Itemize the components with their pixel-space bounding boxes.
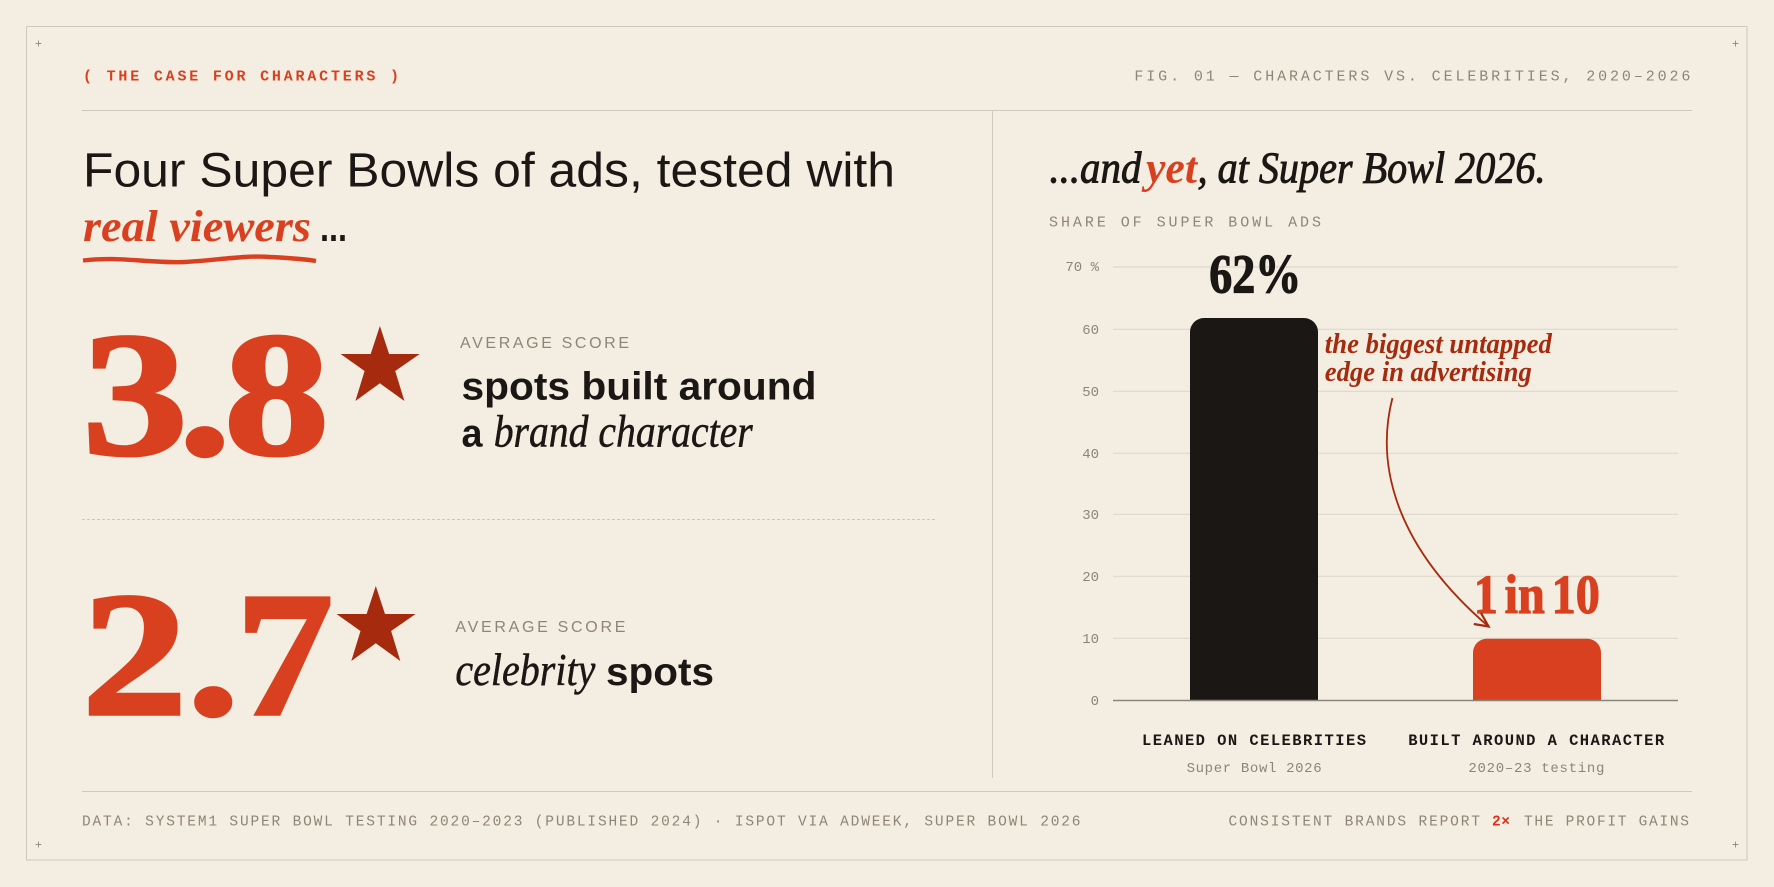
category label: celebrities: Super Bowl 2026 (1187, 761, 1322, 777)
y axis labels: 20 (1082, 570, 1099, 586)
y axis labels: 30 (1082, 508, 1099, 524)
heading: and yet: yet (1141, 144, 1199, 193)
y axis labels: 40 (1082, 447, 1099, 463)
label: average score celebrity: spots (606, 651, 714, 694)
bar: built around a character (1473, 639, 1601, 700)
bar chart (1065, 244, 1678, 710)
value: 1 in 10: 1 in 10 (1474, 564, 1600, 625)
label: average score character: spots built around (462, 365, 816, 408)
footer: profit note (1228, 814, 1689, 830)
number 2.7: 2. (82, 558, 240, 753)
label: average score character (460, 335, 816, 457)
heading: four super bowls: real viewers (83, 202, 311, 251)
label: average score character: AVERAGE SCORE (460, 335, 629, 352)
panel: right chart (1049, 144, 1678, 777)
y axis labels: 10 (1082, 632, 1099, 648)
callout (1325, 328, 1552, 388)
category label: character: BUILT AROUND A CHARACTER (1408, 732, 1665, 750)
y axis labels (1065, 260, 1100, 710)
label: average score celebrity: celebrity (455, 645, 595, 695)
text: + (1732, 38, 1739, 52)
footer: profit note: THE PROFIT GAINS (1524, 814, 1689, 830)
squiggle underline (83, 257, 316, 262)
eyebrow: the case for characters: ( THE CASE FOR CHARACTERS ) (83, 68, 399, 85)
footer: data source: DATA: SYSTEM1 SUPER BOWL TESTING 2020–2023 (PUBLISHED 2024) · ISPOT VIA ADWEEK, SUPER BOWL 2026 (82, 814, 1080, 830)
number 2.7: 7 (236, 557, 333, 753)
value: 62%: 62% (1209, 244, 1301, 304)
callout: the biggest untapped (1325, 328, 1552, 360)
category label: character (1408, 732, 1665, 777)
heading: and yet: ...and (1049, 144, 1142, 193)
figure caption: FIG. 01 — CHARACTERS VS. CELEBRITIES, 2020–2026 (1134, 68, 1690, 86)
label: average score character: a (462, 413, 483, 456)
text: + (1732, 838, 1739, 852)
arrow (1387, 398, 1489, 626)
text: + (35, 38, 42, 52)
label: average score celebrity (455, 619, 714, 695)
category label: character: 2020–23 testing (1468, 761, 1604, 777)
y axis labels: 50 (1082, 385, 1099, 401)
number 2.7 (82, 557, 333, 753)
chart subtitle: SHARE OF SUPER BOWL ADS (1049, 214, 1321, 232)
panel: left scores (82, 145, 936, 753)
footer: profit note: CONSISTENT BRANDS REPORT (1228, 814, 1480, 830)
icon: star (341, 326, 420, 401)
y axis labels: 60 (1082, 323, 1099, 339)
bar: leaned on celebrities (1190, 318, 1318, 700)
score: 3.8 stars (82, 298, 420, 493)
label: average score celebrity: AVERAGE SCORE (455, 619, 625, 636)
number 3.8: 3.8 (82, 298, 329, 493)
heading: and yet (1049, 144, 1546, 193)
heading: four super bowls: Four Super Bowls of ads, tested with (83, 145, 895, 198)
callout: edge in advertising (1325, 356, 1532, 388)
heading: four super bowls: ... (320, 206, 347, 250)
footer: profit note: 2× (1492, 814, 1510, 830)
icon: star (336, 586, 416, 661)
heading: and yet: , at Super Bowl 2026. (1198, 144, 1546, 193)
category label: celebrities: LEANED ON CELEBRITIES (1142, 732, 1366, 750)
label: average score character: brand character (494, 407, 753, 457)
category label: celebrities (1142, 732, 1366, 777)
score: 2.7 stars (82, 557, 416, 753)
text: + (35, 838, 42, 852)
heading: four super bowls (83, 145, 895, 251)
y axis labels: 0 (1091, 694, 1099, 710)
y axis labels: 70 % (1065, 260, 1100, 276)
